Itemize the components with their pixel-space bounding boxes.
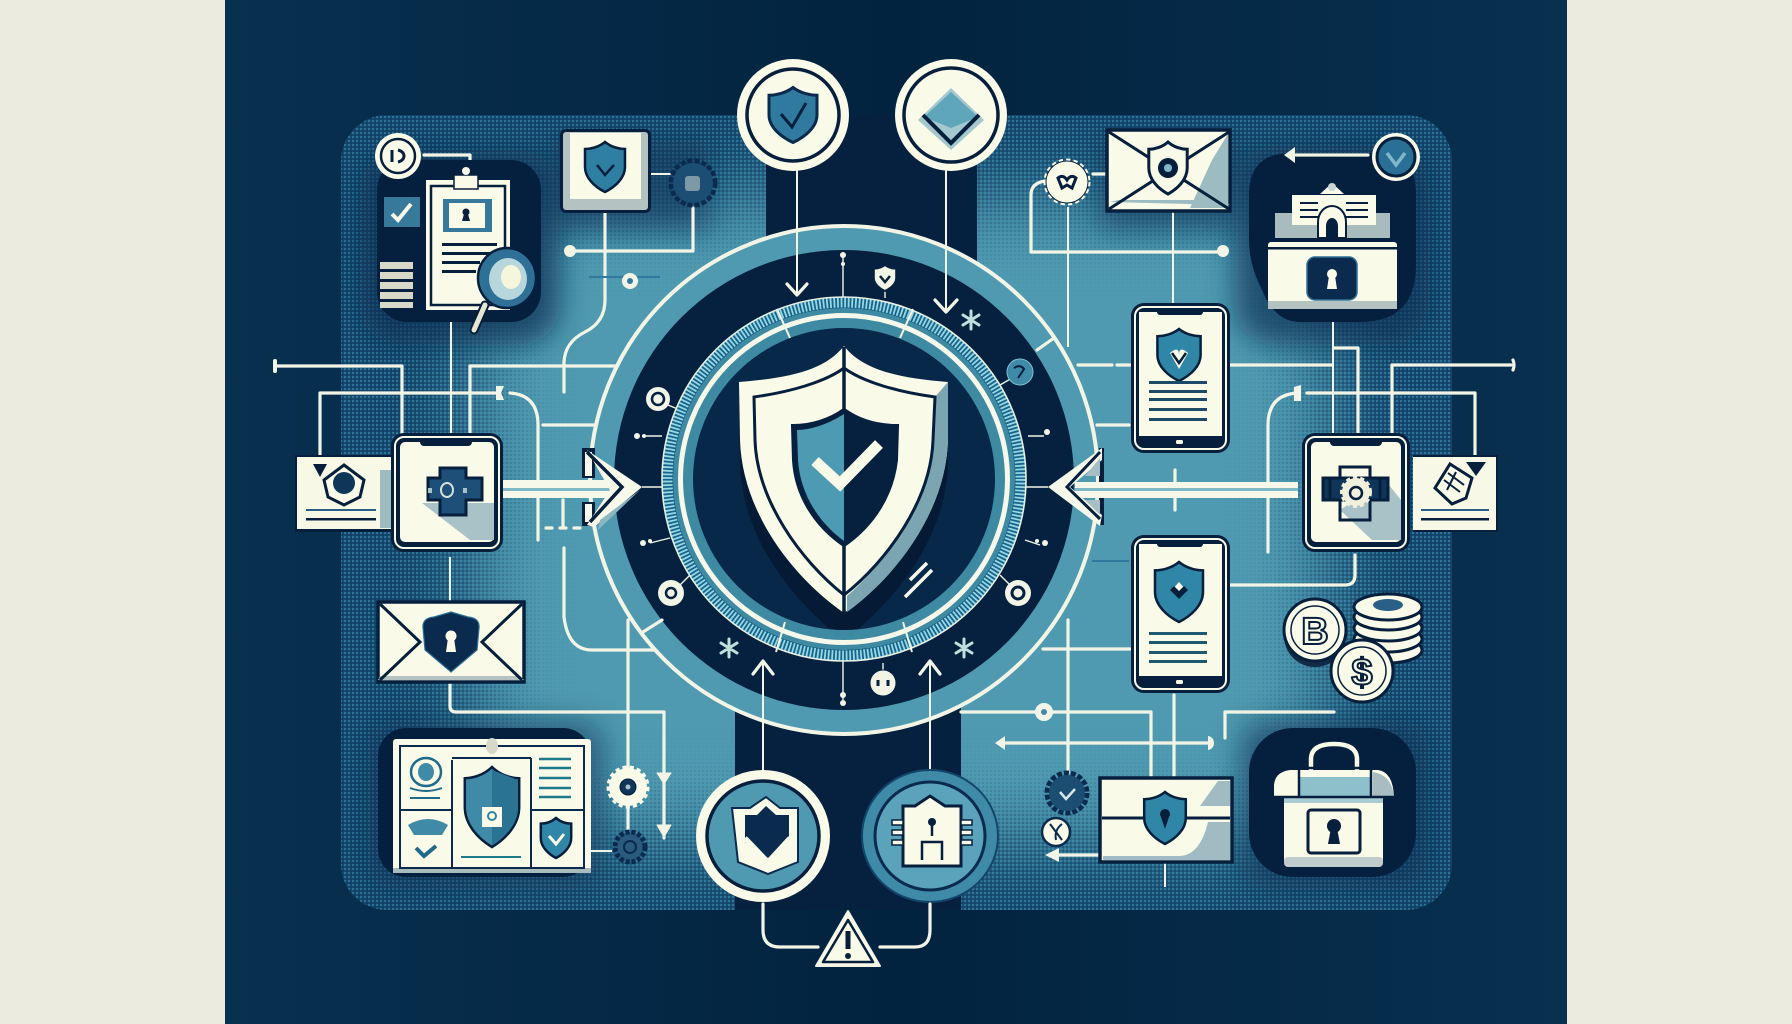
connector network left	[275, 155, 693, 851]
bottom circle: shield emblem	[696, 661, 830, 947]
panel: vault with lock top right	[1249, 133, 1420, 322]
inner striped ring	[662, 297, 1026, 661]
central dark band top	[766, 115, 977, 265]
top circle: shield check	[737, 59, 849, 295]
connector network right	[961, 174, 1514, 887]
icon: cream gear	[1046, 161, 1088, 203]
icon: small cream coin	[1042, 818, 1070, 846]
outer ring	[590, 226, 1098, 734]
dark navy background	[225, 0, 1567, 1024]
panel: right phone with gear	[1302, 433, 1410, 552]
icon: dark gear left	[615, 832, 645, 862]
icon: cream gear left	[609, 768, 647, 806]
icon: coin stack: B	[1301, 611, 1329, 653]
panel: right document	[1413, 455, 1498, 532]
panel: left phone with chip	[391, 433, 503, 552]
ring markers and small badges	[634, 252, 1050, 706]
panel: envelope with shield top	[1107, 130, 1230, 211]
left arrow	[503, 448, 642, 530]
panel: dashboard card	[378, 728, 591, 877]
central shield	[739, 346, 948, 640]
icon: dark shield gear	[1047, 773, 1087, 813]
right arrow	[1048, 448, 1298, 526]
panel: clipboard document with magnifier	[375, 133, 541, 330]
panel: envelope with keyhole left	[378, 602, 524, 682]
panel: padlock bag	[1249, 728, 1416, 877]
icon: coin stack	[1284, 594, 1422, 702]
bottom circle: profile emblem	[862, 661, 998, 947]
teal panel	[341, 115, 1452, 910]
icon: gear dark	[671, 161, 715, 205]
panel: envelope bottom right	[1100, 778, 1232, 862]
icon: coin stack: $	[1351, 652, 1373, 694]
panel: upper phone right	[1131, 303, 1230, 453]
panel: shield card top	[560, 129, 651, 213]
warning triangle	[816, 911, 880, 966]
panel: left envelope document	[295, 455, 392, 532]
panel: lower phone right	[1131, 535, 1230, 693]
central dark band bottom	[735, 705, 961, 910]
top circle: diamond check	[895, 59, 1007, 312]
